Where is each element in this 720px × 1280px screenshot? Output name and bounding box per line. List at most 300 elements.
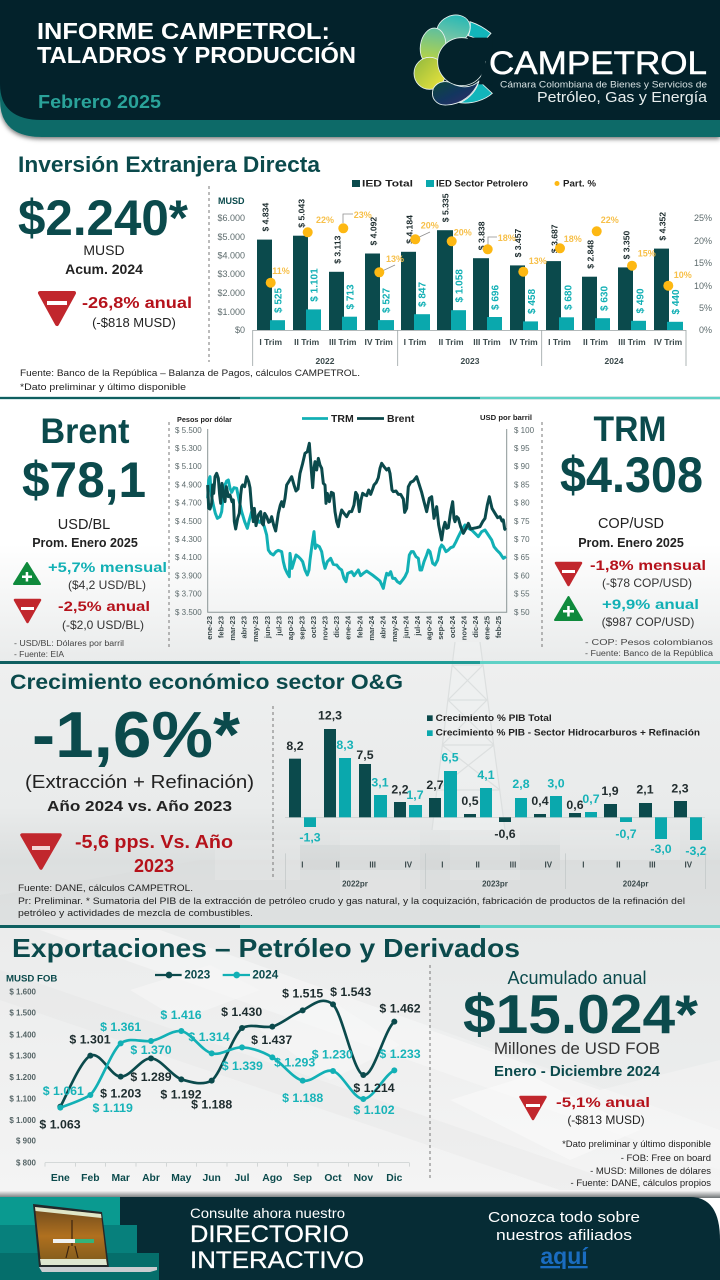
x axis labels: ago-24: [425, 615, 434, 640]
affiliates text line 2: nuestros afiliados: [496, 1228, 632, 1244]
dark bar values: $ 2.848: [586, 240, 596, 269]
values 2024: $ 1.314: [188, 1030, 230, 1044]
teal values: -1,3: [299, 830, 321, 844]
teal values: [299, 738, 707, 858]
dark bar values: $ 4.184: [404, 215, 414, 244]
right axis labels: [694, 213, 712, 335]
notes: - COP: Pesos colombianos: [585, 638, 713, 647]
dark values: -0,6: [494, 827, 516, 841]
x axis labels: III Trim: [618, 337, 646, 347]
x axis labels: III Trim: [329, 337, 357, 347]
legend: Crecimiento % PIB Total: [436, 713, 552, 723]
x axis labels: I Trim: [404, 337, 427, 347]
section divider: [0, 396, 720, 400]
y axis labels: $ 1.600: [9, 988, 37, 997]
teal bar values: $ 525: [274, 288, 284, 313]
legend: [352, 178, 596, 188]
x axis labels: ago-23: [286, 616, 295, 640]
header teal ribbon: [0, 60, 720, 137]
x axis labels: May: [171, 1173, 192, 1184]
dark bar values: $ 5.043: [296, 199, 306, 228]
big number: $78,1: [22, 452, 146, 508]
TRM series: [208, 477, 506, 588]
values 2023: [39, 985, 421, 1132]
notes: - MUSD: Millones de dólares: [590, 1166, 711, 1177]
legend: IED Total: [362, 178, 413, 188]
y axis labels: [9, 988, 37, 1168]
dark values: 2,7: [426, 778, 444, 792]
left axis labels: $ 4.300: [175, 535, 202, 544]
values 2023: $ 1.063: [39, 1118, 81, 1132]
icon: green up triangle: [14, 563, 40, 584]
monthly change: +5,7% mensual: [48, 559, 167, 575]
dark bars: [289, 729, 687, 822]
x axis labels: IV: [405, 860, 413, 869]
x axis labels: Nov: [354, 1173, 373, 1184]
values 2023: $ 1.430: [221, 1005, 262, 1019]
right axis labels: 20%: [694, 236, 712, 246]
left axis labels: $ 5.500: [175, 426, 202, 435]
dark bar values: $ 3.350: [622, 231, 632, 259]
y axis title: MUSD: [218, 196, 245, 206]
x axis labels: I: [582, 860, 584, 869]
legend: [155, 969, 279, 982]
x axis labels: jul-23: [274, 616, 283, 637]
legend: [427, 713, 700, 738]
x axis labels: may-24: [390, 615, 399, 642]
x axis labels: [51, 1173, 403, 1184]
panel: TRM: [555, 410, 714, 658]
values 2024: $ 1.361: [100, 1020, 141, 1034]
teal values: -3,2: [685, 844, 707, 858]
y axis labels: $ 1.000: [9, 1116, 37, 1125]
left axis labels: $5.000: [217, 232, 245, 242]
participation labels: 10%: [674, 270, 692, 280]
notes: - FOB: Free on board: [621, 1153, 711, 1164]
heading: Exportaciones – Petróleo y Derivados: [12, 933, 520, 963]
x axis labels: ene-24: [344, 615, 353, 640]
right axis labels: $ 100: [514, 426, 535, 435]
dark values: 2,1: [636, 782, 654, 796]
x axis labels: I Trim: [259, 337, 282, 347]
logo tagline 2: Petróleo, Gas y Energía: [537, 90, 708, 106]
monthly change: -1,8% mensual: [590, 557, 706, 573]
x axis labels: IV Trim: [365, 337, 393, 347]
x axis labels: jun-24: [402, 615, 410, 639]
panel: Inversión Extranjera Directa: [18, 152, 712, 393]
teal bar values: $ 696: [490, 285, 502, 310]
right axis labels: $ 85: [514, 480, 530, 490]
x axis labels: 2023: [461, 356, 480, 366]
values 2024: $ 1.230: [312, 1048, 353, 1062]
notes: *Dato preliminar y último disponible: [562, 1139, 711, 1150]
participation labels: 20%: [421, 220, 439, 230]
x axis labels: IV Trim: [509, 337, 538, 347]
chart: TRM and Brent lines: [175, 413, 535, 642]
teal bar values: $ 680: [564, 285, 574, 310]
notes: - Fuente: EIA: [14, 650, 65, 659]
x axis labels: 2022pr: [342, 879, 368, 888]
source note: *Dato preliminar y último disponible: [20, 382, 186, 393]
big number: $15.024*: [463, 983, 699, 1045]
teal bar values: $ 440: [671, 289, 682, 314]
unit: USD/BL: [58, 517, 110, 533]
values 2024: $ 1.339: [222, 1059, 263, 1073]
x axis labels: Jul: [235, 1173, 250, 1184]
participation labels: 15%: [638, 248, 656, 258]
left axis labels: $2.000: [217, 288, 245, 298]
teal values: 1,7: [406, 788, 424, 802]
dark values: 2,3: [671, 781, 689, 795]
x axis labels: III Trim: [473, 337, 501, 347]
right axis labels: $ 65: [514, 553, 530, 562]
x axis labels: II Trim: [438, 337, 464, 347]
x axis labels: II: [475, 860, 480, 869]
dark bar values: [260, 193, 668, 269]
right axis labels: 15%: [694, 258, 712, 268]
x axis labels: II: [335, 860, 340, 869]
x axis labels: IV: [685, 860, 693, 869]
dark values: 0,4: [531, 794, 549, 808]
heading: Brent: [40, 412, 130, 451]
logo mark petals: [414, 10, 492, 105]
directory text: Consulte ahora nuestro: [190, 1205, 345, 1221]
x axis labels: feb-24: [355, 615, 364, 638]
annual change: -2,5% anual: [58, 598, 150, 614]
right axis labels: 25%: [694, 213, 712, 223]
legend: Brent: [387, 413, 415, 425]
x axis: [45, 1163, 409, 1167]
x axis labels: oct-23: [309, 616, 318, 638]
icon: red down triangle: [15, 600, 40, 622]
left axis labels: $ 4.700: [175, 498, 202, 508]
x axis labels: 2023pr: [482, 879, 508, 888]
accumulated title: Acumulado anual: [507, 968, 647, 988]
change line 1: -5,6 pps. Vs. Año: [75, 832, 233, 852]
series 2023: [57, 1001, 397, 1110]
values 2024: $ 1.293: [274, 1056, 315, 1070]
participation labels: 20%: [454, 228, 472, 238]
panel: Brent: [14, 412, 167, 659]
values 2023: $ 1.192: [160, 1088, 202, 1102]
legend: IED Sector Petrolero: [436, 178, 529, 188]
values 2023: $ 1.203: [100, 1087, 141, 1101]
section divider: [0, 925, 720, 928]
x axis labels: mar-24: [367, 615, 376, 641]
values 2024: [43, 1008, 421, 1117]
icon: red down triangle: [22, 835, 60, 868]
left axis labels: $ 4.100: [175, 553, 202, 562]
right axis labels: $ 90: [514, 462, 530, 471]
footer teal steps: [0, 1197, 159, 1280]
x axis labels: Ene: [51, 1173, 70, 1184]
left axis labels: $ 3.700: [175, 590, 202, 598]
unit: MUSD: [83, 242, 125, 258]
x axis labels: abr-24: [378, 615, 387, 639]
values 2023: $ 1.214: [353, 1081, 395, 1095]
x axis labels: Oct: [324, 1173, 342, 1184]
values 2023: $ 1.437: [251, 1033, 292, 1047]
period: Acum. 2024: [65, 261, 143, 277]
monthly value: ($4,2 USD/BL): [68, 578, 146, 592]
left axis labels: $6.000: [217, 213, 245, 223]
values 2024: $ 1.233: [379, 1047, 421, 1061]
right axis labels: $ 55: [514, 590, 530, 598]
dark values: 1,9: [601, 784, 619, 798]
values 2024: $ 1.102: [353, 1103, 395, 1117]
annual value: (-$2,0 USD/BL): [62, 618, 144, 632]
icon: red down triangle: [40, 293, 74, 324]
notes: Fuente: DANE, cálculos CAMPETROL.: [18, 883, 193, 894]
notes: petróleo y actividades de mezcla de combustibles.: [18, 908, 253, 919]
directory title: DIRECTORIO: [190, 1221, 349, 1248]
left axis labels: [217, 213, 245, 335]
annual value: ($987 COP/USD): [602, 615, 694, 629]
left axis labels: $ 4.900: [175, 480, 202, 490]
big number: $4.308: [560, 447, 703, 503]
x axis labels: sep-24: [436, 615, 445, 640]
annual change: +9,9% anual: [602, 596, 699, 612]
teal bar values: $ 713: [346, 284, 356, 310]
x axis labels: Jun: [202, 1173, 221, 1184]
icon: red down triangle: [556, 563, 581, 585]
y axis labels: $ 900: [16, 1137, 37, 1146]
right axis labels: $ 70: [514, 535, 530, 544]
values 2023: $ 1.543: [330, 985, 371, 999]
x axis labels: [205, 615, 503, 642]
chart: IED bars: [217, 178, 712, 366]
dark values: 7,5: [356, 748, 374, 762]
change line 2: 2023: [134, 856, 174, 876]
x axis labels: Dic: [386, 1173, 403, 1184]
left axis labels: $ 3.900: [175, 572, 202, 580]
background: industrial plant photo: [0, 930, 720, 1190]
x axis labels: 2024: [605, 356, 624, 366]
footer background: [0, 1197, 720, 1280]
right axis labels: 5%: [699, 303, 712, 313]
x axis labels: Mar: [111, 1173, 130, 1184]
right axis labels: 10%: [694, 281, 712, 291]
teal bar values: $ 527: [382, 288, 392, 313]
separators: [286, 853, 706, 889]
right axis labels: $ 80: [514, 498, 530, 508]
y axis labels: $ 1.300: [9, 1052, 37, 1061]
icon: red down triangle: [520, 1097, 546, 1119]
icon: green up triangle: [555, 597, 582, 620]
values 2024: $ 1.119: [92, 1101, 133, 1115]
dark bars: [257, 230, 669, 330]
period: Prom. Enero 2025: [32, 536, 138, 550]
plot axes: [208, 429, 507, 612]
left axis labels: $ 5.100: [175, 462, 202, 471]
Brent series: [208, 443, 506, 540]
teal values: 8,3: [336, 738, 354, 752]
right axis labels: $ 60: [514, 572, 530, 580]
x axis labels: I: [301, 860, 303, 869]
dark bar values: $ 3.687: [550, 224, 560, 253]
x axis labels: III: [369, 860, 376, 869]
y axis labels: $ 800: [16, 1159, 37, 1168]
panel: Exportaciones: [6, 933, 711, 1189]
notes: [562, 1139, 711, 1189]
legend: Crecimiento % PIB - Sector Hidrocarburos + Refinación: [436, 728, 700, 738]
left axis labels: $0: [235, 325, 245, 335]
participation labels: 13%: [386, 254, 404, 264]
x axis labels: Sep: [293, 1173, 312, 1184]
right axis labels: $ 95: [514, 444, 530, 453]
x axis labels: I Trim: [548, 337, 571, 347]
values 2023: $ 1.462: [379, 1002, 421, 1016]
dark bar values: $ 3.838: [476, 221, 486, 250]
x axis labels: feb-25: [494, 616, 503, 638]
dark values: 8,2: [286, 739, 304, 753]
annual change value: (-$818 MUSD): [92, 315, 176, 330]
series 2024: [57, 1028, 397, 1111]
teal values: -3,0: [650, 842, 672, 856]
annual change: -5,1% anual: [556, 1094, 650, 1110]
comparison: Año 2024 vs. Año 2023: [47, 798, 232, 815]
dark bar values: $ 4.352: [658, 212, 668, 241]
footer band: [0, 1191, 720, 1280]
dark values: 2,2: [391, 782, 409, 796]
x axis labels: nov-24: [459, 615, 468, 640]
participation labels: [272, 210, 692, 280]
x axis labels: abr-23: [240, 616, 249, 639]
dark bar values: $ 3.457: [513, 229, 523, 257]
teal bar values: $ 458: [527, 289, 538, 314]
x axis labels: feb-23: [217, 616, 226, 638]
x axis labels: ene-23: [205, 616, 214, 640]
values 2023: $ 1.301: [69, 1032, 111, 1046]
participation labels: 18%: [498, 233, 516, 243]
x axis labels: jul-24: [413, 615, 422, 637]
link aquí: aquí: [540, 1243, 589, 1269]
participation labels: 22%: [316, 215, 334, 225]
values 2023: $ 1.289: [130, 1070, 172, 1084]
notes: - USD/BL: Dólares por barril: [14, 639, 124, 648]
teal bar values: [274, 268, 682, 314]
heading: Inversión Extranjera Directa: [18, 152, 321, 177]
legend: TRM: [331, 413, 354, 425]
logo wordmark: CAMPETROL: [489, 45, 707, 81]
logo Campetrol: [414, 10, 708, 106]
x axis labels: jun-23: [263, 616, 272, 639]
period: Prom. Enero 2025: [578, 536, 684, 550]
date: Febrero 2025: [38, 92, 161, 112]
dark values: [286, 709, 689, 841]
x axis labels: IV Trim: [654, 337, 683, 347]
dark bar values: $ 4.092: [368, 217, 378, 246]
teal values: 3,0: [547, 776, 565, 790]
right axis title: USD por barril: [480, 413, 532, 422]
unit: COP/USD: [598, 516, 664, 532]
icon: laptop: [33, 1204, 157, 1272]
x axis labels: [259, 337, 683, 366]
dark values: 12,3: [318, 709, 342, 723]
dark values: 0,6: [566, 798, 584, 812]
title line 2: TALADROS Y PRODUCCIÓN: [37, 41, 356, 68]
right axis labels: $ 75: [514, 517, 530, 526]
left axis labels: $ 4.500: [175, 517, 202, 526]
dark bar values: $ 5.335: [440, 193, 450, 222]
panel: Crecimiento económico: [10, 671, 707, 919]
left axis labels: $ 5.300: [175, 444, 202, 453]
x axis labels: Ago: [262, 1173, 282, 1184]
y axis labels: $ 1.500: [9, 1009, 37, 1018]
left axis labels: $1.000: [217, 307, 245, 317]
values 2023: $ 1.515: [282, 987, 323, 1001]
participation labels: 23%: [354, 210, 372, 220]
x axis labels: Abr: [142, 1173, 160, 1184]
teal values: -0,7: [615, 827, 637, 841]
x axis labels: IV: [545, 860, 553, 869]
right axis labels: $ 50: [514, 608, 530, 617]
footer shadow: [0, 1191, 720, 1198]
x axis labels: III: [649, 860, 656, 869]
x axis labels: 2024pr: [623, 879, 649, 888]
teal bar values: $ 847: [418, 282, 428, 307]
notes: [14, 639, 124, 659]
annual change: -26,8% anual: [82, 295, 192, 312]
x axis labels: mar-23: [228, 616, 237, 641]
x axis labels: may-23: [251, 616, 260, 642]
logo tagline: Cámara Colombiana de Bienes y Servicios de: [500, 80, 707, 90]
x axis labels: II Trim: [294, 337, 320, 347]
left axis labels: $3.000: [217, 269, 245, 279]
dark bar values: $ 4.834: [260, 203, 270, 232]
legend: 2023: [184, 969, 211, 982]
big number: $2.240*: [18, 190, 189, 246]
teal bar values: $ 490: [636, 288, 646, 314]
notes: [585, 638, 714, 658]
x axis labels: III: [510, 860, 516, 869]
chart: GDP growth bars: [285, 709, 707, 889]
axis title: MUSD FOB: [6, 973, 58, 983]
values 2024: $ 1.416: [160, 1008, 202, 1022]
participation labels: 18%: [564, 234, 582, 244]
teal bar values: $ 630: [600, 286, 610, 311]
unit: Millones de USD FOB: [494, 1039, 660, 1058]
values 2024: $ 1.061: [43, 1084, 84, 1098]
x axis labels: II: [616, 860, 621, 869]
section divider: [0, 661, 720, 664]
y axis labels: $ 1.200: [9, 1073, 37, 1082]
values 2024: $ 1.370: [130, 1043, 172, 1057]
x axis labels: 2022: [316, 356, 335, 366]
notes: - Fuente: DANE, cálculos propios: [571, 1178, 711, 1189]
values 2023: $ 1.188: [191, 1098, 232, 1112]
participation dots: [266, 223, 673, 291]
notes: - Fuente: Banco de la República: [585, 649, 714, 658]
dark values: 0,5: [461, 794, 479, 808]
annual value: (-$813 MUSD): [567, 1113, 645, 1127]
left axis labels: $4.000: [217, 250, 245, 260]
affiliates text: Conozca todo sobre: [488, 1210, 640, 1226]
x axis labels: ene-25: [482, 616, 491, 640]
teal bar values: $ 1.101: [310, 268, 320, 302]
participation leader lines: [343, 214, 497, 272]
legend: 2024: [252, 969, 279, 982]
teal values: 6,5: [441, 751, 459, 765]
teal bars: [304, 758, 702, 840]
teal bars: [270, 309, 683, 330]
y axis labels: $ 1.100: [9, 1094, 37, 1103]
teal values: 3,1: [371, 775, 389, 789]
heading: TRM: [594, 410, 666, 449]
x axis labels: dic-24: [471, 615, 480, 638]
legend: Part. %: [563, 178, 596, 188]
directory title line 2: INTERACTIVO: [190, 1247, 364, 1274]
